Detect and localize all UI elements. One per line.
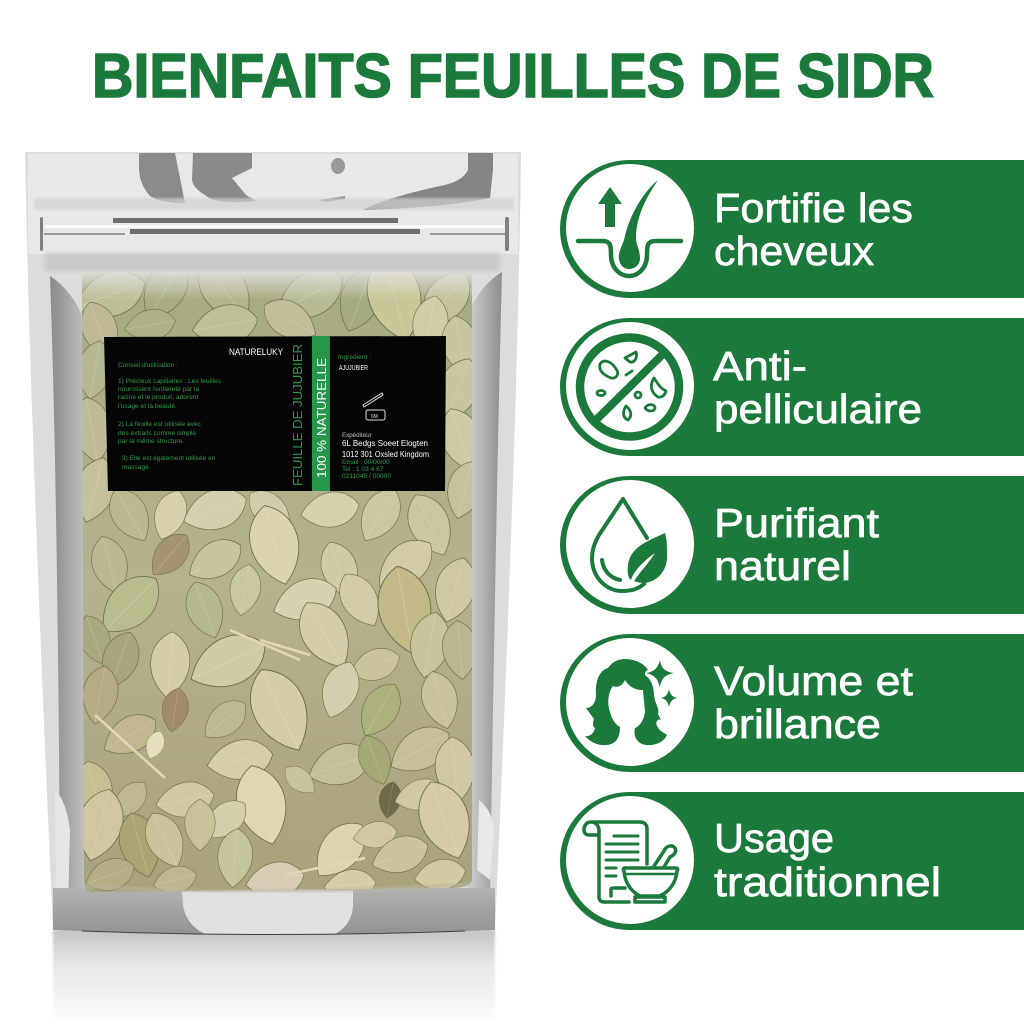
address bbox=[342, 432, 429, 480]
label: Usage bbox=[714, 815, 834, 861]
usage advice: 3) Elle est également utilisée en bbox=[122, 455, 216, 462]
icon disc bbox=[566, 480, 694, 608]
icon: water drop with leaf bbox=[592, 499, 667, 591]
usage advice: massage. bbox=[122, 464, 151, 471]
product bag bbox=[25, 152, 521, 935]
bag top header bbox=[28, 153, 518, 254]
icon: woman with sparkles bbox=[585, 659, 677, 745]
usage advice: l'usage et la beauté. bbox=[118, 403, 177, 410]
address: Email : 00/00/00 bbox=[342, 459, 390, 466]
green bar bbox=[560, 792, 1024, 930]
usage advice: des extraits comme simple bbox=[118, 430, 196, 437]
vertical product name: FEUILLE DE JUJUBIER bbox=[291, 344, 305, 486]
brand name: NATURELUKY bbox=[229, 347, 283, 357]
address: Expéditeur bbox=[342, 432, 372, 439]
green strip bbox=[312, 336, 330, 491]
bottom band bbox=[53, 888, 495, 935]
label second line: traditionnel bbox=[714, 859, 941, 905]
benefit: fortifie les cheveux bbox=[560, 160, 1024, 298]
icon disc bbox=[566, 796, 694, 924]
icon disc bbox=[566, 638, 694, 766]
green bar bbox=[560, 160, 1024, 298]
icon: crossed out dandruff flakes bbox=[580, 338, 679, 436]
usage advice: racine et le produit, adorent bbox=[118, 394, 198, 401]
usage advice: par la même structure. bbox=[118, 438, 184, 445]
benefit: usage traditionnel bbox=[560, 792, 1024, 930]
usage advice: Conseil d'utilisation : bbox=[118, 362, 178, 369]
address: 6L Bedgs Soeet Elogten bbox=[342, 438, 428, 448]
label second line: naturel bbox=[714, 543, 851, 589]
ingredient name: AJUJUBIER bbox=[339, 363, 368, 372]
benefit: volume et brillance bbox=[560, 634, 1024, 772]
icon: hair root with up arrow bbox=[578, 180, 681, 276]
right gusset bbox=[468, 272, 502, 900]
dried jujube leaves bbox=[82, 272, 472, 892]
floor shadow bbox=[53, 930, 495, 1024]
left gusset bbox=[50, 276, 88, 900]
benefit: purifiant naturel bbox=[560, 476, 1024, 614]
label: Volume et bbox=[714, 658, 914, 704]
icon disc bbox=[566, 164, 694, 292]
address: 1012 301 Oxsled Kingdom bbox=[342, 449, 429, 459]
green bar bbox=[560, 318, 1024, 456]
benefit: anti-pelliculaire bbox=[560, 318, 1024, 456]
usage advice: 1) Précieux capillaires : Les feuilles bbox=[118, 378, 222, 385]
bottom tab bbox=[182, 890, 353, 934]
right edge highlight bbox=[477, 800, 494, 880]
black product label bbox=[104, 336, 446, 491]
label second line: brillance bbox=[714, 701, 881, 747]
label: Anti- bbox=[713, 343, 807, 389]
title: BIENFAITS FEUILLES DE SIDR bbox=[92, 42, 934, 111]
left edge highlight bbox=[55, 790, 70, 912]
green bar bbox=[560, 634, 1024, 772]
zipper bbox=[40, 217, 509, 251]
icon: scroll with mortar and pestle bbox=[584, 822, 678, 902]
icon: opened jar bbox=[363, 393, 385, 420]
ingredient: Ingrédient : bbox=[338, 354, 371, 361]
frosted band bbox=[45, 253, 500, 271]
address: 0211045 / 00000 bbox=[342, 473, 391, 480]
green bar bbox=[560, 476, 1024, 614]
label: Purifiant bbox=[714, 500, 880, 546]
bottom seam bbox=[82, 931, 465, 934]
address: Tel : 1 03 4 67 bbox=[342, 466, 384, 473]
bag body bbox=[25, 152, 521, 935]
label second line: pelliculaire bbox=[714, 386, 922, 432]
usage advice bbox=[118, 362, 222, 471]
vertical natural claim: 100 % NATURELLE bbox=[315, 358, 329, 478]
usage advice: nourrissent l'entiéreté par la bbox=[118, 386, 199, 393]
label second line: cheveux bbox=[714, 228, 875, 274]
icon disc bbox=[566, 322, 694, 450]
label: Fortifie les bbox=[714, 185, 913, 231]
usage advice: 2) La feuille est utilisée avec bbox=[118, 421, 202, 428]
icon: opened jar: 6M bbox=[371, 414, 378, 420]
bottom edge of filling bbox=[84, 884, 470, 892]
